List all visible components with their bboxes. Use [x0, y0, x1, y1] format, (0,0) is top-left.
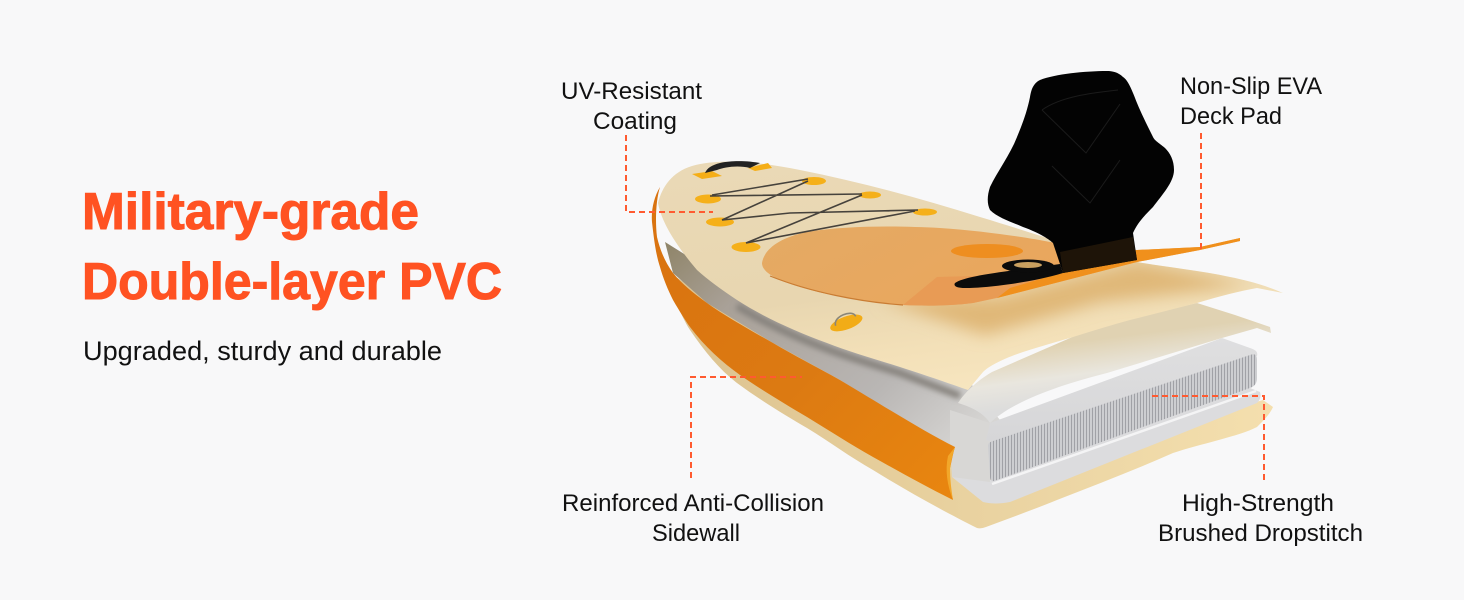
callout leader: sidewall	[691, 377, 802, 478]
deck shadow beneath pad	[880, 262, 1250, 335]
layer: dropstitch core lower skin	[952, 388, 1261, 504]
callout leader: UV-resistant coating	[626, 135, 713, 212]
core left side	[950, 410, 990, 482]
label: UV-Resistant Coating: Coating	[593, 108, 677, 135]
seat ring	[1002, 260, 1054, 272]
label: Non-Slip EVA Deck Pad: Deck Pad	[1180, 103, 1282, 130]
callout leader: dropstitch	[1152, 396, 1264, 482]
yellow D-ring patches	[695, 177, 937, 252]
core top	[986, 338, 1257, 442]
seat embossed chevrons	[1042, 90, 1120, 203]
seat back	[988, 71, 1174, 273]
sidewall bright end	[947, 447, 955, 500]
label: Reinforced Anti-Collision Sidewall: Reinforced Anti-Collision	[562, 490, 824, 517]
dropstitch lower highlight	[992, 391, 1256, 484]
heading line 2: Double-layer PVC	[82, 253, 502, 311]
layer: non-slip EVA pad	[762, 227, 1240, 306]
label: Non-Slip EVA Deck Pad: Non-Slip EVA	[1180, 73, 1322, 100]
side D-ring	[827, 309, 865, 335]
seat strap base	[1060, 237, 1137, 273]
layer: grey side sheet	[665, 242, 1000, 482]
label: Reinforced Anti-Collision Sidewall	[562, 490, 824, 547]
pad lighter tint	[903, 270, 1060, 306]
carry handle	[705, 161, 760, 173]
pad orange edge	[997, 238, 1240, 298]
label: UV-Resistant Coating	[561, 78, 702, 135]
pad dark rim	[770, 276, 903, 305]
layer: orange reinforced sidewall	[652, 187, 955, 500]
bungee cords	[710, 179, 918, 243]
seat clip	[954, 264, 1063, 288]
infographic canvas	[84, 71, 1362, 546]
pad orange spot	[951, 244, 1023, 258]
layer: bottom hull	[665, 270, 1273, 528]
label: High-Strength Brushed Dropstitch: High-Strength	[1182, 490, 1334, 517]
bungee and fittings	[692, 161, 937, 335]
seat ring opening	[1014, 262, 1042, 268]
label: High-Strength Brushed Dropstitch: Brushed Dropstitch	[1158, 520, 1363, 547]
board exploded view	[652, 71, 1283, 528]
label: Non-Slip EVA Deck Pad	[1180, 73, 1322, 130]
layer: second white sheet	[958, 303, 1271, 423]
subheading: Upgraded, sturdy and durable	[83, 336, 442, 366]
label: Reinforced Anti-Collision Sidewall: Sidewall	[652, 520, 740, 547]
callout leader: non-slip deck pad	[1200, 133, 1202, 249]
heading line 1: Military-grade	[82, 183, 419, 241]
under-deck shadow	[737, 306, 960, 396]
brushed stitched face	[988, 354, 1257, 481]
label: High-Strength Brushed Dropstitch	[1158, 490, 1363, 547]
label: UV-Resistant Coating: UV-Resistant	[561, 78, 702, 105]
layer: top deck sheet	[658, 162, 1283, 390]
carry handle patches	[692, 163, 772, 179]
layer: dropstitch core	[950, 338, 1257, 482]
kayak seat	[954, 71, 1174, 288]
pad main	[762, 227, 1240, 306]
text panel: headline	[82, 183, 502, 366]
